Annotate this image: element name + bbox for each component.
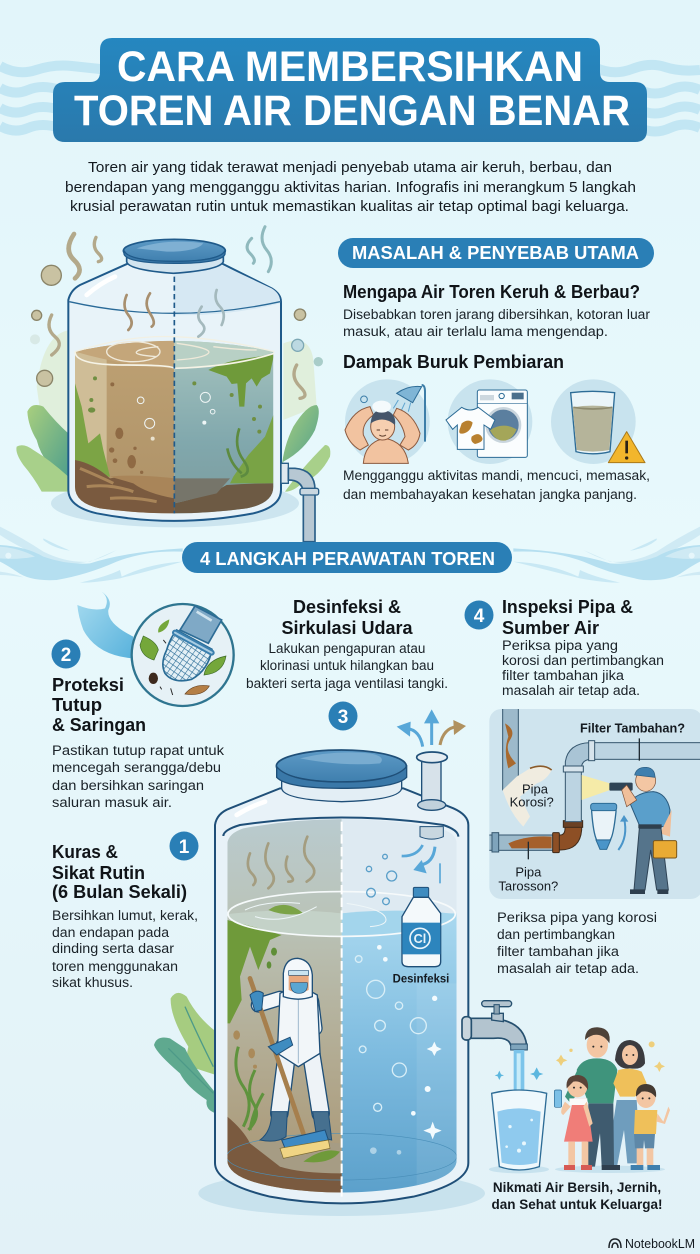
illustration: pipe inspection panel: Pipa bbox=[515, 865, 542, 880]
section pill: masalah dan penyebab bbox=[338, 238, 654, 268]
step 1 badge bbox=[170, 832, 198, 860]
wave bands behind title bbox=[0, 65, 700, 132]
step 2 text: saluran masuk air. bbox=[52, 795, 172, 810]
step 3 text bbox=[246, 641, 448, 691]
illustration: pipe inspection panel: Filter Tambahan? bbox=[580, 720, 685, 735]
step 4 text: filter tambahan jika bbox=[502, 668, 625, 683]
water wave divider left bbox=[0, 527, 183, 583]
illustration: main tank cleaning bbox=[198, 709, 485, 1216]
text under pipe panel: Periksa pipa yang korosi bbox=[497, 910, 657, 925]
step 4 text: Periksa pipa yang bbox=[502, 638, 618, 653]
step 3 text: Lakukan pengapuran atau bbox=[269, 641, 425, 656]
water stream and glass bbox=[489, 1050, 549, 1173]
step 1 heading: (6 Bulan Sekali) bbox=[52, 882, 187, 902]
section pill: 4 langkah: 4 LANGKAH PERAWATAN TOREN bbox=[200, 549, 495, 569]
section pill: masalah dan penyebab: MASALAH & PENYEBAB UTAMA bbox=[352, 243, 639, 263]
step 3 heading: Desinfeksi & bbox=[293, 597, 401, 617]
vent pipe and arrows bbox=[397, 709, 466, 883]
closing message: Nikmati Air Bersih, Jernih, bbox=[493, 1180, 661, 1195]
heading: dampak buruk: Dampak Buruk Pembiaran bbox=[343, 352, 564, 372]
intro text bbox=[65, 160, 636, 215]
bottle: Cl bbox=[414, 932, 426, 946]
step 2 heading bbox=[52, 675, 146, 735]
step 1 text: dinding serta dasar bbox=[52, 941, 175, 956]
step 1 heading: Kuras & bbox=[52, 842, 118, 862]
illustration: pipe inspection panel: Korosi? bbox=[510, 795, 554, 810]
step 4 text bbox=[502, 638, 664, 698]
step 1 heading: Sikat Rutin bbox=[52, 863, 145, 883]
faucet bbox=[462, 1001, 527, 1050]
step 3 badge: 3 bbox=[338, 707, 348, 728]
step 2 text: dan bersihkan saringan bbox=[52, 778, 204, 793]
heading: mengapa air keruh: Mengapa Air Toren Keruh & Berbau? bbox=[343, 282, 640, 302]
tank shell bbox=[215, 788, 468, 1203]
NotebookLM watermark: NotebookLM bbox=[625, 1236, 695, 1251]
closing message bbox=[491, 1180, 663, 1212]
step 1 text: Bersihkan lumut, kerak, bbox=[52, 908, 198, 923]
illustration: pipe inspection panel bbox=[487, 707, 700, 899]
text under pipe panel bbox=[497, 910, 657, 976]
step 3 badge bbox=[328, 702, 358, 730]
text: penyebab: Disebabkan toren jarang dibersihkan, kotoran luar bbox=[343, 307, 651, 322]
step 2 badge: 2 bbox=[61, 645, 71, 666]
title bbox=[53, 38, 647, 142]
decorative leaves left of tank bbox=[154, 993, 216, 1113]
text under pipe panel: masalah air tetap ada. bbox=[497, 961, 639, 976]
step 1 text: dan endapan pada bbox=[52, 925, 169, 940]
step 4 text: masalah air tetap ada. bbox=[502, 683, 640, 698]
icon: stained shirt and washing machine bbox=[446, 379, 532, 464]
intro text: berendapan yang mengganggu aktivitas harian. Infografis ini merangkum 5 langkah bbox=[65, 180, 636, 196]
text: penyebab: masuk, atau air terlalu lama mengendap. bbox=[343, 324, 608, 339]
step 2 badge bbox=[52, 640, 80, 668]
step 3 heading: Sirkulasi Udara bbox=[281, 618, 414, 638]
step 4 text: korosi dan pertimbangkan bbox=[502, 653, 664, 668]
person in protective suit bbox=[250, 958, 332, 1158]
step 1 badge: 1 bbox=[179, 837, 190, 858]
step 3 text: bakteri serta jaga ventilasi tangki. bbox=[246, 676, 448, 691]
title: TOREN AIR DENGAN BENAR bbox=[74, 87, 630, 135]
step 4 heading: Sumber Air bbox=[502, 618, 599, 638]
water wave divider right bbox=[513, 527, 700, 583]
step 3 text: klorinasi untuk hilangkan bau bbox=[260, 658, 434, 673]
section pill: 4 langkah bbox=[182, 542, 512, 573]
step 4 heading: Inspeksi Pipa & bbox=[502, 597, 633, 617]
intro text: Toren air yang tidak terawat menjadi penyebab utama air keruh, berbau, dan bbox=[88, 160, 612, 176]
step 2 text bbox=[52, 743, 224, 810]
icon: shower person bbox=[345, 379, 430, 464]
text: dampak: Mengganggu aktivitas mandi, mencuci, memasak, bbox=[343, 468, 650, 483]
text under pipe panel: filter tambahan jika bbox=[497, 944, 620, 959]
tank interior: dirty and clean halves bbox=[227, 813, 457, 1200]
intro text: krusial perawatan rutin untuk memastikan kualitas air tetap optimal bagi keluarga. bbox=[70, 199, 629, 215]
step 1 heading bbox=[52, 842, 187, 902]
step 2 text: Pastikan tutup rapat untuk bbox=[52, 743, 224, 758]
step 4 heading bbox=[502, 597, 633, 638]
lid bbox=[276, 750, 407, 802]
step 2 heading: Proteksi bbox=[52, 675, 124, 695]
text: dampak: dan membahayakan kesehatan jangka panjang. bbox=[343, 487, 637, 502]
text under pipe panel: dan pertimbangkan bbox=[497, 927, 615, 942]
step 2 text: mencegah serangga/debu bbox=[52, 760, 221, 775]
step 1 text: sikat khusus. bbox=[52, 975, 133, 990]
illustration: faucet, glass and family bbox=[462, 1001, 670, 1173]
step 2 illustration: strainer bbox=[77, 592, 234, 706]
text: penyebab bbox=[343, 307, 651, 339]
bottle: Desinfeksi bbox=[393, 973, 449, 986]
step 1 text bbox=[52, 908, 198, 990]
illustration: dirty tank split view bbox=[16, 227, 330, 542]
step 4 badge: 4 bbox=[474, 606, 485, 627]
step 2 heading: & Saringan bbox=[52, 715, 146, 735]
step 3 heading bbox=[281, 597, 414, 638]
family bbox=[554, 1027, 670, 1173]
title: CARA MEMBERSIHKAN bbox=[117, 43, 583, 91]
step 1 text: toren menggunakan bbox=[52, 959, 178, 974]
icon: dirty glass with warning bbox=[551, 379, 645, 464]
bottle bbox=[393, 887, 449, 986]
illustration: pipe inspection panel: Pipa bbox=[522, 781, 549, 796]
closing message: dan Sehat untuk Keluarga! bbox=[491, 1197, 663, 1212]
step 4 badge bbox=[464, 600, 494, 630]
step 2 heading: Tutup bbox=[52, 695, 102, 715]
icons: dampak buruk bbox=[345, 379, 645, 464]
text: dampak bbox=[343, 468, 650, 502]
illustration: pipe inspection panel: Tarosson? bbox=[498, 879, 558, 894]
